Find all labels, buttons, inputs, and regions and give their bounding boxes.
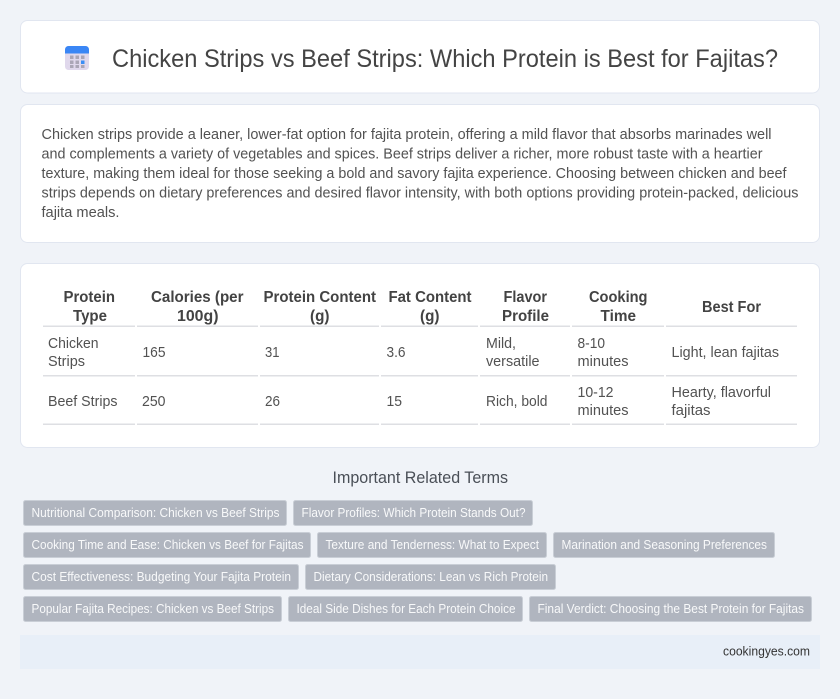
title: Chicken Strips vs Beef Strips: Which Protein is Best for Fajitas? xyxy=(112,45,778,73)
table row: chicken strips: 8-10 xyxy=(578,336,605,352)
tag: popular recipes xyxy=(24,596,282,622)
table header row: Cooking xyxy=(589,289,648,306)
table row: chicken strips: 31 xyxy=(265,345,280,361)
table row: beef strips: fajitas xyxy=(672,403,710,419)
table row: chicken strips: minutes xyxy=(578,354,628,370)
text block: description paragraph: fajita meals. xyxy=(42,204,120,221)
tag: cooking time xyxy=(24,532,310,558)
tag: final verdict: Final Verdict: Choosing the Best Protein for Fajitas xyxy=(538,601,804,616)
table header row: Calories (per xyxy=(151,289,244,306)
tag: side dishes: Ideal Side Dishes for Each Protein Choice xyxy=(296,601,516,616)
table header row: Fat Content xyxy=(388,289,472,306)
table row: beef strips: 10-12 xyxy=(578,385,614,401)
table header row: Type xyxy=(73,308,107,325)
tag: nutritional comparison: Nutritional Comparison: Chicken vs Beef Strips xyxy=(32,505,280,520)
table header row: (g) xyxy=(420,308,440,325)
table row: beef strips: Rich, bold xyxy=(486,394,548,410)
footer source text: cookingyes.com xyxy=(723,644,810,658)
tag: cost effectiveness: Cost Effectiveness: Budgeting Your Fajita Protein xyxy=(32,569,291,584)
text block: description paragraph: strips depends on dietary preferences and desired flavor intensity, with both options providing protein-packed, delicious xyxy=(42,184,798,202)
tag: flavor profiles xyxy=(294,500,532,526)
panel: header xyxy=(20,20,820,93)
tag: flavor profiles: Flavor Profiles: Which Protein Stands Out? xyxy=(302,505,526,520)
tag: marination xyxy=(554,532,774,558)
text block: description paragraph: texture, making them ideal for those seeking a bold and savory fajita experience. Choosing between chicken and beef xyxy=(42,165,787,182)
table header row: (g) xyxy=(310,308,330,325)
text block: description paragraph xyxy=(42,126,798,221)
panel: description xyxy=(20,104,820,242)
table row: chicken strips: Strips xyxy=(48,354,85,370)
table header row: Protein Content xyxy=(264,289,376,306)
table row: chicken strips xyxy=(48,336,779,370)
table header row: Best For xyxy=(702,299,761,316)
table row: beef strips: Hearty, flavorful xyxy=(672,385,771,401)
text block: description paragraph: and complements a variety of vegetables and spices. Beef strips deliver a richer, more robust taste with a heartier xyxy=(42,146,763,162)
table row: beef strips: 26 xyxy=(265,394,280,410)
text block: description paragraph: Chicken strips provide a leaner, lower-fat option for fajita protein, offering a mild flavor that absorbs marinades well xyxy=(42,126,772,143)
tag: cost effectiveness xyxy=(24,564,298,590)
tag: texture and tenderness: Texture and Tenderness: What to Expect xyxy=(326,537,539,552)
tag: texture and tenderness xyxy=(318,532,546,558)
tag: final verdict xyxy=(530,596,812,622)
table row: beef strips xyxy=(48,385,771,419)
tag: marination: Marination and Seasoning Preferences xyxy=(562,537,767,552)
table row: chicken strips: Mild, xyxy=(486,336,516,352)
tag: dietary considerations: Dietary Considerations: Lean vs Rich Protein xyxy=(314,569,548,584)
tag: cooking time: Cooking Time and Ease: Chicken vs Beef for Fajitas xyxy=(32,537,304,552)
table header row xyxy=(64,289,761,325)
table header row: Protein xyxy=(64,289,115,306)
panel: comparison table xyxy=(20,264,820,448)
table row: beef strips: minutes xyxy=(578,403,628,419)
footer xyxy=(20,635,820,669)
tag: side dishes xyxy=(288,596,522,622)
tag: dietary considerations xyxy=(306,564,556,590)
table row: beef strips: 15 xyxy=(386,394,402,410)
table header row: 100g) xyxy=(177,308,218,325)
table row: beef strips: 250 xyxy=(142,394,166,410)
table rules xyxy=(43,326,797,425)
icon: calendar xyxy=(65,46,89,70)
table row: chicken strips: 165 xyxy=(142,345,166,361)
tag: popular recipes: Popular Fajita Recipes: Chicken vs Beef Strips xyxy=(32,601,274,616)
table header row: Flavor xyxy=(504,289,547,306)
table row: chicken strips: versatile xyxy=(486,354,540,370)
table row: chicken strips: Chicken xyxy=(48,336,98,352)
table header row: Profile xyxy=(502,308,549,325)
table header row: Time xyxy=(600,308,636,325)
table row: chicken strips: Light, lean fajitas xyxy=(672,345,779,361)
heading: important related terms: Important Related Terms xyxy=(332,469,508,487)
table row: beef strips: Beef Strips xyxy=(48,394,118,410)
table row: chicken strips: 3.6 xyxy=(386,345,406,361)
tag list xyxy=(24,500,812,622)
tag: nutritional comparison xyxy=(24,500,286,526)
